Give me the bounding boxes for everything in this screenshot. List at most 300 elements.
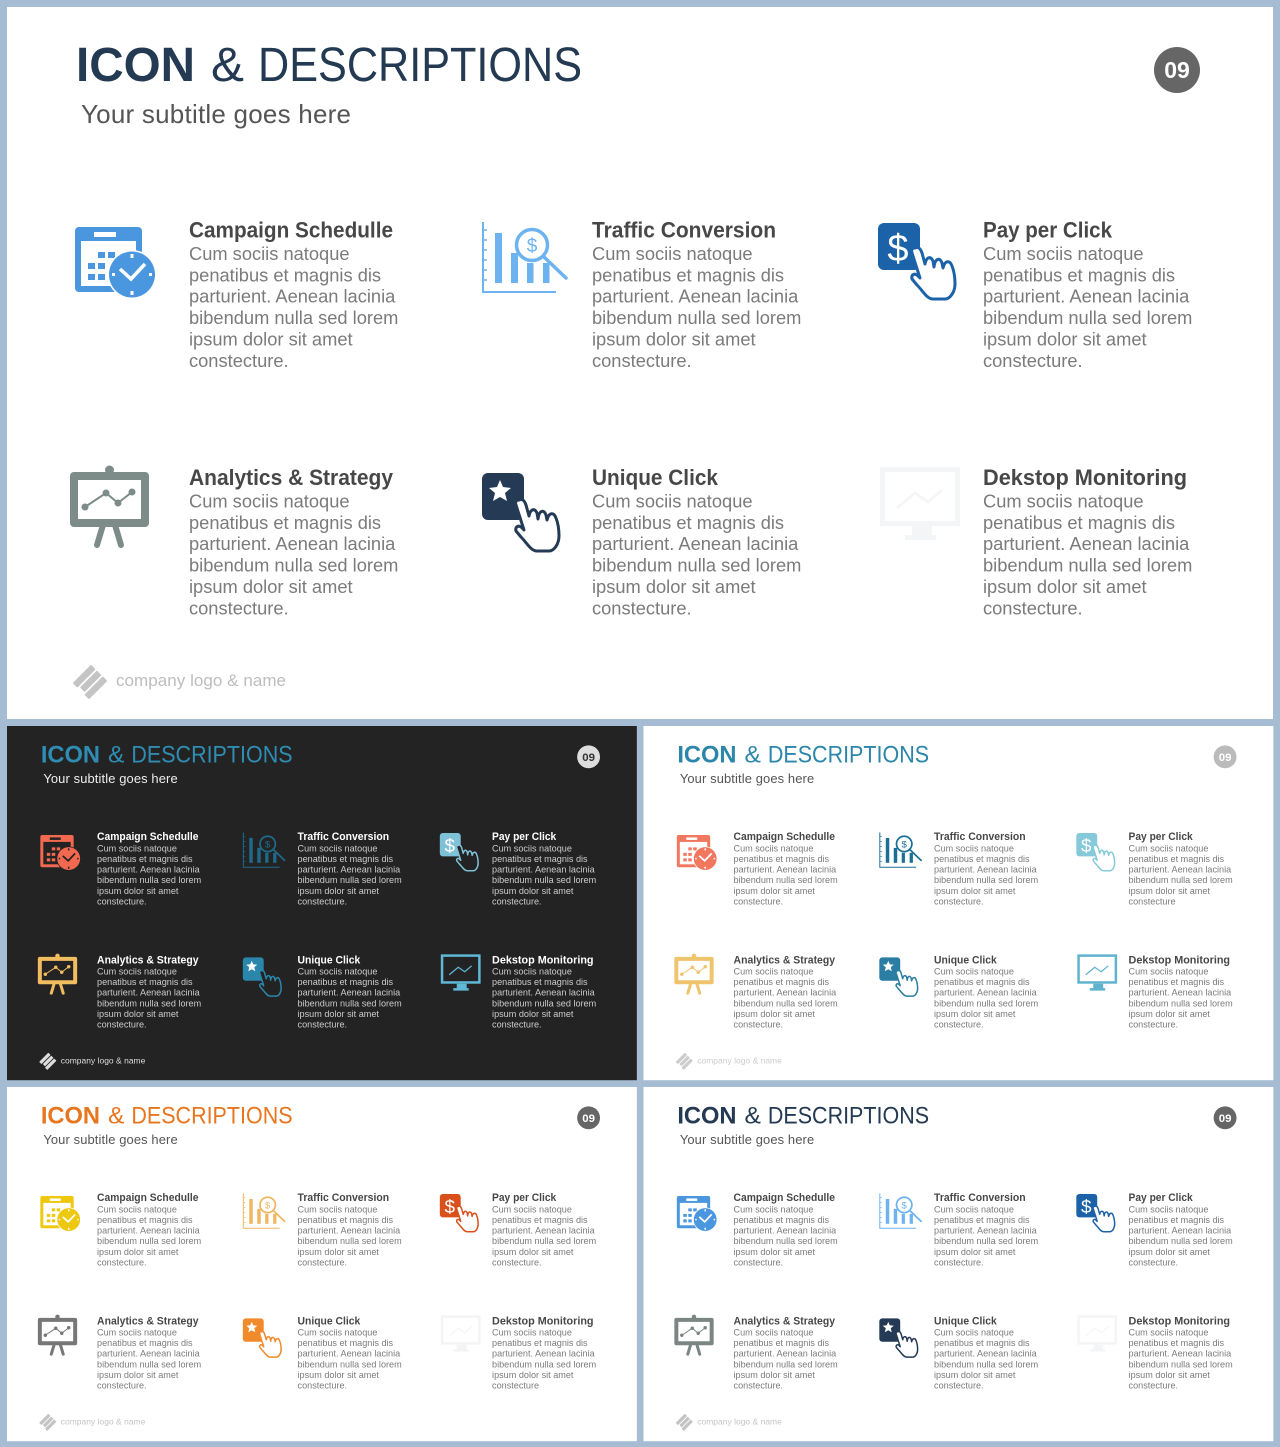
description: dekstop monitoring: penatibus et magnis dis bbox=[983, 512, 1175, 533]
description: analytics and strategy: penatibus et magnis dis bbox=[734, 977, 830, 987]
description: unique click: constecture. bbox=[934, 1381, 984, 1391]
heading: dekstop monitoring: Dekstop Monitoring bbox=[492, 1315, 594, 1327]
description: campaign schedulle: ipsum dolor sit amet bbox=[97, 886, 179, 896]
description: campaign schedulle: penatibus et magnis dis bbox=[734, 854, 830, 864]
description: campaign schedulle: Cum sociis natoque bbox=[189, 243, 350, 264]
panel: main slide bbox=[7, 7, 1273, 719]
description: unique click: ipsum dolor sit amet bbox=[592, 576, 756, 597]
description: traffic conversion: penatibus et magnis dis bbox=[934, 1215, 1030, 1225]
item: unique click bbox=[243, 1315, 402, 1391]
description: dekstop monitoring: parturient. Aenean lacinia bbox=[983, 533, 1190, 554]
description: traffic conversion: ipsum dolor sit amet bbox=[592, 328, 756, 349]
description: dekstop monitoring: Cum sociis natoque bbox=[983, 490, 1144, 512]
icon: dollar button with hand bbox=[1076, 1194, 1115, 1232]
description: dekstop monitoring: constecture. bbox=[1129, 1020, 1178, 1030]
description: unique click: constecture. bbox=[298, 1381, 347, 1391]
description: campaign schedulle: bibendum nulla sed lorem bbox=[734, 875, 838, 885]
icon: presentation board bbox=[676, 1315, 712, 1354]
description: campaign schedulle: bibendum nulla sed lorem bbox=[97, 875, 201, 885]
description: pay per click: parturient. Aenean lacinia bbox=[492, 865, 596, 875]
item: traffic conversion bbox=[880, 1192, 1038, 1267]
icon: monitor bbox=[442, 1317, 479, 1352]
description: unique click: Cum sociis natoque bbox=[592, 490, 753, 512]
description: unique click: ipsum dolor sit amet bbox=[298, 1009, 379, 1019]
description: pay per click: bibendum nulla sed lorem bbox=[983, 307, 1192, 328]
description: traffic conversion: bibendum nulla sed lorem bbox=[934, 1236, 1038, 1246]
description: unique click: parturient. Aenean lacinia bbox=[298, 988, 401, 998]
description: traffic conversion: constecture. bbox=[298, 1257, 347, 1267]
description: traffic conversion: parturient. Aenean lacinia bbox=[298, 865, 401, 875]
description: pay per click: bibendum nulla sed lorem bbox=[1129, 875, 1233, 885]
company logo and name: company logo & name bbox=[61, 1055, 146, 1065]
description: unique click: Cum sociis natoque bbox=[298, 967, 377, 977]
item: pay per click bbox=[878, 218, 1192, 371]
icon: star button with hand bbox=[482, 473, 559, 551]
icon: calendar with clock bbox=[40, 835, 81, 871]
description: unique click: parturient. Aenean lacinia bbox=[934, 1349, 1038, 1359]
description: analytics and strategy: constecture. bbox=[97, 1381, 147, 1391]
item: analytics and strategy bbox=[676, 1315, 838, 1391]
icon: chart with magnifier bbox=[243, 832, 285, 867]
description: analytics and strategy: penatibus et magnis dis bbox=[97, 1338, 193, 1348]
heading: traffic conversion: Traffic Conversion bbox=[298, 1192, 389, 1204]
description: analytics and strategy: constecture. bbox=[734, 1020, 783, 1030]
description: traffic conversion: bibendum nulla sed lorem bbox=[592, 307, 801, 328]
item: traffic conversion bbox=[880, 831, 1038, 906]
heading: traffic conversion: Traffic Conversion bbox=[934, 1192, 1026, 1204]
icon: chart with magnifier bbox=[880, 832, 921, 867]
description: campaign schedulle: ipsum dolor sit amet bbox=[734, 886, 815, 896]
description: campaign schedulle: penatibus et magnis dis bbox=[97, 1215, 193, 1225]
item: dekstop monitoring bbox=[1079, 954, 1233, 1030]
heading: analytics and strategy: Analytics & Strategy bbox=[734, 1315, 836, 1327]
item: analytics and strategy bbox=[40, 954, 201, 1030]
heading: analytics and strategy: Analytics & Strategy bbox=[97, 1315, 199, 1327]
item: traffic conversion bbox=[243, 1192, 402, 1267]
company logo and name: company logo & name bbox=[697, 1416, 782, 1426]
title: & bbox=[744, 1102, 761, 1129]
icon: monitor bbox=[1079, 956, 1116, 991]
item: analytics and strategy bbox=[74, 465, 398, 618]
description: campaign schedulle: penatibus et magnis dis bbox=[189, 264, 381, 285]
heading: dekstop monitoring: Dekstop Monitoring bbox=[1129, 954, 1230, 966]
icon: star button with hand bbox=[243, 1318, 281, 1357]
description: campaign schedulle: parturient. Aenean lacinia bbox=[734, 865, 837, 875]
item: campaign schedulle bbox=[40, 831, 201, 906]
icon: monitor bbox=[442, 956, 479, 991]
description: campaign schedulle: Cum sociis natoque bbox=[734, 1204, 813, 1214]
description: unique click: parturient. Aenean lacinia bbox=[298, 1349, 401, 1359]
heading: dekstop monitoring: Dekstop Monitoring bbox=[492, 954, 594, 966]
description: analytics and strategy: ipsum dolor sit amet bbox=[97, 1009, 179, 1019]
icon: monitor bbox=[1079, 1317, 1116, 1352]
description: unique click: bibendum nulla sed lorem bbox=[592, 555, 801, 576]
heading: unique click: Unique Click bbox=[934, 954, 998, 966]
title: & bbox=[744, 741, 761, 768]
description: analytics and strategy: constecture. bbox=[189, 597, 289, 618]
description: traffic conversion: penatibus et magnis dis bbox=[298, 1215, 394, 1225]
title: ICON bbox=[41, 1102, 100, 1129]
heading: analytics and strategy: Analytics & Strategy bbox=[734, 954, 836, 966]
description: campaign schedulle: ipsum dolor sit amet bbox=[97, 1247, 179, 1257]
title: ICON bbox=[41, 741, 100, 768]
description: traffic conversion: ipsum dolor sit amet bbox=[298, 886, 379, 896]
description: unique click: penatibus et magnis dis bbox=[934, 977, 1030, 987]
description: traffic conversion: penatibus et magnis dis bbox=[592, 264, 784, 285]
heading: campaign schedulle: Campaign Schedulle bbox=[734, 1192, 835, 1204]
icon: dollar button with hand bbox=[440, 1194, 478, 1232]
description: pay per click: Cum sociis natoque bbox=[983, 243, 1144, 264]
description: pay per click: Cum sociis natoque bbox=[492, 843, 572, 853]
page number badge bbox=[577, 745, 600, 768]
description: traffic conversion: parturient. Aenean lacinia bbox=[298, 1226, 401, 1236]
description: dekstop monitoring: constecture. bbox=[983, 597, 1083, 618]
description: unique click: Cum sociis natoque bbox=[298, 1328, 377, 1338]
description: analytics and strategy: parturient. Aenean lacinia bbox=[189, 533, 396, 554]
page number badge bbox=[1154, 47, 1200, 93]
description: traffic conversion: constecture. bbox=[298, 896, 347, 906]
description: analytics and strategy: ipsum dolor sit amet bbox=[97, 1370, 179, 1380]
description: analytics and strategy: Cum sociis natoque bbox=[189, 490, 350, 512]
description: pay per click: Cum sociis natoque bbox=[1129, 843, 1208, 853]
description: unique click: Cum sociis natoque bbox=[934, 967, 1014, 977]
item: analytics and strategy bbox=[40, 1315, 201, 1391]
title: DESCRIPTIONS bbox=[258, 39, 582, 92]
description: campaign schedulle: bibendum nulla sed lorem bbox=[734, 1236, 838, 1246]
description: unique click: bibendum nulla sed lorem bbox=[934, 998, 1038, 1008]
description: pay per click: Cum sociis natoque bbox=[1129, 1204, 1208, 1214]
item: pay per click bbox=[440, 831, 596, 906]
title bbox=[677, 741, 929, 768]
description: dekstop monitoring: constecture. bbox=[492, 1020, 542, 1030]
description: pay per click: ipsum dolor sit amet bbox=[1129, 886, 1210, 896]
title: DESCRIPTIONS bbox=[131, 741, 293, 768]
heading: campaign schedulle: Campaign Schedulle bbox=[734, 831, 835, 843]
description: campaign schedulle: ipsum dolor sit amet bbox=[189, 328, 353, 349]
item: campaign schedulle bbox=[677, 1192, 838, 1267]
heading: pay per click: Pay per Click bbox=[492, 831, 557, 843]
heading: traffic conversion: Traffic Conversion bbox=[934, 831, 1026, 843]
item: traffic conversion bbox=[243, 831, 402, 906]
description: dekstop monitoring: ipsum dolor sit amet bbox=[983, 576, 1147, 597]
heading: unique click: Unique Click bbox=[298, 1315, 361, 1327]
panel: dark theme slide bbox=[7, 726, 637, 1080]
description: unique click: bibendum nulla sed lorem bbox=[298, 1359, 402, 1369]
description: pay per click: ipsum dolor sit amet bbox=[492, 1247, 574, 1257]
description: traffic conversion: parturient. Aenean lacinia bbox=[934, 865, 1038, 875]
heading: campaign schedulle: Campaign Schedulle bbox=[189, 218, 393, 242]
icon: presentation board bbox=[40, 1315, 75, 1354]
heading: pay per click: Pay per Click bbox=[492, 1192, 557, 1204]
description: pay per click: parturient. Aenean lacinia bbox=[1129, 1226, 1232, 1236]
item: pay per click bbox=[1076, 1192, 1233, 1267]
icon: chart with magnifier bbox=[483, 222, 566, 292]
description: analytics and strategy: parturient. Aenean lacinia bbox=[734, 988, 837, 998]
description: pay per click: bibendum nulla sed lorem bbox=[1129, 1236, 1233, 1246]
company logo and name: company logo & name bbox=[697, 1055, 782, 1065]
subtitle: Your subtitle goes here bbox=[81, 99, 351, 129]
description: pay per click: bibendum nulla sed lorem bbox=[492, 875, 596, 885]
description: campaign schedulle: constecture. bbox=[97, 1257, 147, 1267]
description: analytics and strategy: bibendum nulla sed lorem bbox=[97, 1359, 201, 1369]
description: unique click: parturient. Aenean lacinia bbox=[934, 988, 1038, 998]
icon: dollar button with hand bbox=[878, 223, 955, 299]
icon: calendar with clock bbox=[40, 1196, 81, 1232]
description: pay per click: parturient. Aenean lacinia bbox=[492, 1226, 596, 1236]
description: analytics and strategy: Cum sociis natoque bbox=[734, 1328, 813, 1338]
description: pay per click: constecture. bbox=[492, 1257, 542, 1267]
panel: orange theme slide bbox=[7, 1087, 637, 1441]
item: campaign schedulle bbox=[677, 831, 838, 906]
item: campaign schedulle bbox=[40, 1192, 201, 1267]
item: unique click bbox=[879, 1315, 1038, 1391]
item: traffic conversion bbox=[483, 218, 801, 371]
icon: presentation board bbox=[676, 954, 712, 993]
description: campaign schedulle: parturient. Aenean lacinia bbox=[734, 1226, 837, 1236]
description: traffic conversion: bibendum nulla sed lorem bbox=[298, 1236, 402, 1246]
item: campaign schedulle bbox=[75, 218, 398, 371]
item: unique click bbox=[482, 465, 801, 618]
description: dekstop monitoring: bibendum nulla sed lorem bbox=[983, 555, 1192, 576]
description: pay per click: Cum sociis natoque bbox=[492, 1204, 572, 1214]
icon: star button with hand bbox=[243, 957, 281, 996]
description: campaign schedulle: bibendum nulla sed lorem bbox=[97, 1236, 201, 1246]
description: pay per click: penatibus et magnis dis bbox=[1129, 1215, 1225, 1225]
description: dekstop monitoring: Cum sociis natoque bbox=[1129, 967, 1208, 977]
description: dekstop monitoring: bibendum nulla sed lorem bbox=[1129, 998, 1233, 1008]
description: analytics and strategy: Cum sociis natoque bbox=[97, 967, 177, 977]
description: campaign schedulle: penatibus et magnis dis bbox=[734, 1215, 830, 1225]
icon: calendar with clock bbox=[677, 1196, 717, 1232]
description: unique click: penatibus et magnis dis bbox=[298, 977, 394, 987]
title bbox=[677, 1102, 929, 1129]
title: ICON bbox=[677, 1102, 737, 1129]
description: unique click: constecture. bbox=[592, 597, 692, 618]
description: analytics and strategy: parturient. Aenean lacinia bbox=[97, 988, 201, 998]
description: unique click: constecture. bbox=[934, 1020, 984, 1030]
description: dekstop monitoring: Cum sociis natoque bbox=[492, 1328, 572, 1338]
description: traffic conversion: Cum sociis natoque bbox=[934, 843, 1014, 853]
description: traffic conversion: constecture. bbox=[592, 350, 692, 371]
company logo and name bbox=[676, 1053, 782, 1070]
icon: calendar with clock bbox=[677, 835, 717, 871]
description: dekstop monitoring: parturient. Aenean lacinia bbox=[1129, 988, 1232, 998]
icon: presentation board bbox=[74, 466, 145, 545]
description: dekstop monitoring: Cum sociis natoque bbox=[1129, 1328, 1208, 1338]
description: analytics and strategy: penatibus et magnis dis bbox=[97, 977, 193, 987]
icon: presentation board bbox=[40, 954, 75, 993]
description: pay per click: parturient. Aenean lacinia bbox=[983, 286, 1190, 307]
description: unique click: penatibus et magnis dis bbox=[592, 512, 784, 533]
description: campaign schedulle: bibendum nulla sed lorem bbox=[189, 307, 398, 328]
panel: navy theme slide bbox=[644, 1087, 1273, 1441]
description: analytics and strategy: bibendum nulla sed lorem bbox=[97, 998, 201, 1008]
title: ICON bbox=[76, 39, 195, 92]
company logo and name bbox=[73, 665, 286, 699]
company logo and name bbox=[39, 1053, 146, 1070]
description: traffic conversion: Cum sociis natoque bbox=[592, 243, 753, 264]
title bbox=[76, 39, 582, 92]
title bbox=[41, 741, 293, 768]
description: pay per click: bibendum nulla sed lorem bbox=[492, 1236, 596, 1246]
subtitle: Your subtitle goes here bbox=[680, 1132, 814, 1147]
description: analytics and strategy: penatibus et magnis dis bbox=[189, 512, 381, 533]
description: unique click: penatibus et magnis dis bbox=[934, 1338, 1030, 1348]
description: campaign schedulle: Cum sociis natoque bbox=[97, 1204, 177, 1214]
title: ICON bbox=[677, 741, 737, 768]
title bbox=[41, 1102, 293, 1129]
description: dekstop monitoring: parturient. Aenean lacinia bbox=[1129, 1349, 1232, 1359]
description: unique click: penatibus et magnis dis bbox=[298, 1338, 394, 1348]
subtitle: Your subtitle goes here bbox=[680, 771, 814, 786]
description: dekstop monitoring: penatibus et magnis dis bbox=[1129, 977, 1225, 987]
description: analytics and strategy: bibendum nulla sed lorem bbox=[189, 555, 398, 576]
description: analytics and strategy: parturient. Aenean lacinia bbox=[734, 1349, 837, 1359]
description: pay per click: constecture. bbox=[492, 896, 542, 906]
description: pay per click: ipsum dolor sit amet bbox=[1129, 1247, 1210, 1257]
description: pay per click: penatibus et magnis dis bbox=[492, 1215, 588, 1225]
description: traffic conversion: parturient. Aenean lacinia bbox=[934, 1226, 1038, 1236]
description: unique click: bibendum nulla sed lorem bbox=[298, 998, 402, 1008]
description: campaign schedulle: parturient. Aenean lacinia bbox=[97, 1226, 201, 1236]
description: analytics and strategy: parturient. Aenean lacinia bbox=[97, 1349, 201, 1359]
description: campaign schedulle: parturient. Aenean lacinia bbox=[97, 865, 201, 875]
description: dekstop monitoring: penatibus et magnis dis bbox=[492, 977, 588, 987]
description: analytics and strategy: ipsum dolor sit amet bbox=[189, 576, 353, 597]
icon: star button with hand bbox=[879, 1318, 918, 1357]
description: analytics and strategy: bibendum nulla sed lorem bbox=[734, 998, 838, 1008]
icon: chart with magnifier bbox=[243, 1193, 285, 1228]
description: unique click: constecture. bbox=[298, 1020, 347, 1030]
description: unique click: parturient. Aenean lacinia bbox=[592, 533, 799, 554]
item: dekstop monitoring bbox=[442, 954, 596, 1030]
page number badge bbox=[1214, 1106, 1237, 1129]
page number badge: 09 bbox=[1219, 752, 1231, 764]
heading: unique click: Unique Click bbox=[298, 954, 361, 966]
description: unique click: ipsum dolor sit amet bbox=[934, 1009, 1016, 1019]
description: pay per click: ipsum dolor sit amet bbox=[492, 886, 574, 896]
description: dekstop monitoring: constecture bbox=[492, 1381, 539, 1391]
description: pay per click: ipsum dolor sit amet bbox=[983, 328, 1147, 349]
title: & bbox=[108, 1102, 124, 1129]
description: dekstop monitoring: Cum sociis natoque bbox=[492, 967, 572, 977]
description: traffic conversion: constecture. bbox=[934, 896, 984, 906]
description: campaign schedulle: Cum sociis natoque bbox=[97, 843, 177, 853]
page number badge: 09 bbox=[1164, 57, 1190, 83]
description: dekstop monitoring: ipsum dolor sit amet bbox=[492, 1370, 574, 1380]
title: DESCRIPTIONS bbox=[768, 741, 929, 768]
description: dekstop monitoring: bibendum nulla sed lorem bbox=[1129, 1359, 1233, 1369]
description: dekstop monitoring: penatibus et magnis dis bbox=[1129, 1338, 1225, 1348]
description: campaign schedulle: constecture. bbox=[189, 350, 289, 371]
description: pay per click: constecture. bbox=[983, 350, 1083, 371]
description: analytics and strategy: penatibus et magnis dis bbox=[734, 1338, 830, 1348]
heading: dekstop monitoring: Dekstop Monitoring bbox=[1129, 1315, 1230, 1327]
icon: star button with hand bbox=[879, 957, 918, 996]
description: dekstop monitoring: parturient. Aenean lacinia bbox=[492, 988, 596, 998]
description: analytics and strategy: ipsum dolor sit amet bbox=[734, 1009, 815, 1019]
title: DESCRIPTIONS bbox=[768, 1102, 929, 1129]
heading: pay per click: Pay per Click bbox=[1129, 831, 1194, 843]
heading: traffic conversion: Traffic Conversion bbox=[298, 831, 389, 843]
description: unique click: Cum sociis natoque bbox=[934, 1328, 1014, 1338]
item: pay per click bbox=[1076, 831, 1233, 906]
heading: unique click: Unique Click bbox=[592, 465, 719, 490]
description: analytics and strategy: Cum sociis natoque bbox=[97, 1328, 177, 1338]
item: dekstop monitoring bbox=[882, 465, 1192, 618]
heading: campaign schedulle: Campaign Schedulle bbox=[97, 831, 199, 843]
description: dekstop monitoring: constecture. bbox=[1129, 1381, 1178, 1391]
description: dekstop monitoring: ipsum dolor sit amet bbox=[1129, 1009, 1210, 1019]
description: dekstop monitoring: parturient. Aenean lacinia bbox=[492, 1349, 596, 1359]
item: unique click bbox=[879, 954, 1038, 1030]
description: dekstop monitoring: bibendum nulla sed lorem bbox=[492, 998, 596, 1008]
description: dekstop monitoring: penatibus et magnis dis bbox=[492, 1338, 588, 1348]
description: traffic conversion: parturient. Aenean lacinia bbox=[592, 286, 799, 307]
heading: unique click: Unique Click bbox=[934, 1315, 998, 1327]
icon: dollar button with hand bbox=[1076, 833, 1115, 871]
subtitle: Your subtitle goes here bbox=[43, 1132, 178, 1147]
description: campaign schedulle: constecture. bbox=[734, 896, 783, 906]
description: unique click: bibendum nulla sed lorem bbox=[934, 1359, 1038, 1369]
description: traffic conversion: ipsum dolor sit amet bbox=[934, 1247, 1016, 1257]
description: campaign schedulle: penatibus et magnis dis bbox=[97, 854, 193, 864]
title: & bbox=[211, 39, 244, 92]
description: analytics and strategy: ipsum dolor sit amet bbox=[734, 1370, 815, 1380]
item: dekstop monitoring bbox=[1079, 1315, 1233, 1391]
description: traffic conversion: Cum sociis natoque bbox=[298, 1204, 377, 1214]
heading: pay per click: Pay per Click bbox=[983, 218, 1113, 242]
heading: dekstop monitoring: Dekstop Monitoring bbox=[983, 465, 1187, 490]
icon: calendar with clock bbox=[75, 227, 156, 299]
heading: analytics and strategy: Analytics & Strategy bbox=[189, 465, 394, 490]
description: analytics and strategy: bibendum nulla sed lorem bbox=[734, 1359, 838, 1369]
description: dekstop monitoring: bibendum nulla sed lorem bbox=[492, 1359, 596, 1369]
description: pay per click: constecture bbox=[1129, 896, 1176, 906]
description: analytics and strategy: Cum sociis natoque bbox=[734, 967, 813, 977]
heading: campaign schedulle: Campaign Schedulle bbox=[97, 1192, 199, 1204]
company logo and name: company logo & name bbox=[116, 671, 286, 690]
icon: dollar button with hand bbox=[440, 833, 478, 871]
company logo and name bbox=[39, 1414, 146, 1431]
description: traffic conversion: penatibus et magnis dis bbox=[934, 854, 1030, 864]
title: DESCRIPTIONS bbox=[131, 1102, 293, 1129]
description: traffic conversion: Cum sociis natoque bbox=[934, 1204, 1014, 1214]
icon: monitor bbox=[882, 470, 958, 540]
description: analytics and strategy: constecture. bbox=[97, 1020, 147, 1030]
description: pay per click: constecture. bbox=[1129, 1257, 1178, 1267]
description: traffic conversion: penatibus et magnis dis bbox=[298, 854, 394, 864]
description: campaign schedulle: ipsum dolor sit amet bbox=[734, 1247, 815, 1257]
company logo and name bbox=[676, 1414, 782, 1431]
description: campaign schedulle: constecture. bbox=[97, 896, 147, 906]
subtitle: Your subtitle goes here bbox=[43, 771, 178, 786]
description: traffic conversion: constecture. bbox=[934, 1257, 984, 1267]
description: pay per click: parturient. Aenean lacinia bbox=[1129, 865, 1232, 875]
description: campaign schedulle: Cum sociis natoque bbox=[734, 843, 813, 853]
description: traffic conversion: ipsum dolor sit amet bbox=[298, 1247, 379, 1257]
page number badge bbox=[1214, 745, 1237, 768]
item: dekstop monitoring bbox=[442, 1315, 596, 1391]
page number badge: 09 bbox=[582, 752, 595, 764]
icon: chart with magnifier bbox=[880, 1193, 921, 1228]
description: traffic conversion: Cum sociis natoque bbox=[298, 843, 377, 853]
description: analytics and strategy: constecture. bbox=[734, 1381, 783, 1391]
description: pay per click: penatibus et magnis dis bbox=[1129, 854, 1225, 864]
item: pay per click bbox=[440, 1192, 596, 1267]
description: dekstop monitoring: ipsum dolor sit amet bbox=[1129, 1370, 1210, 1380]
page number badge bbox=[577, 1106, 600, 1129]
